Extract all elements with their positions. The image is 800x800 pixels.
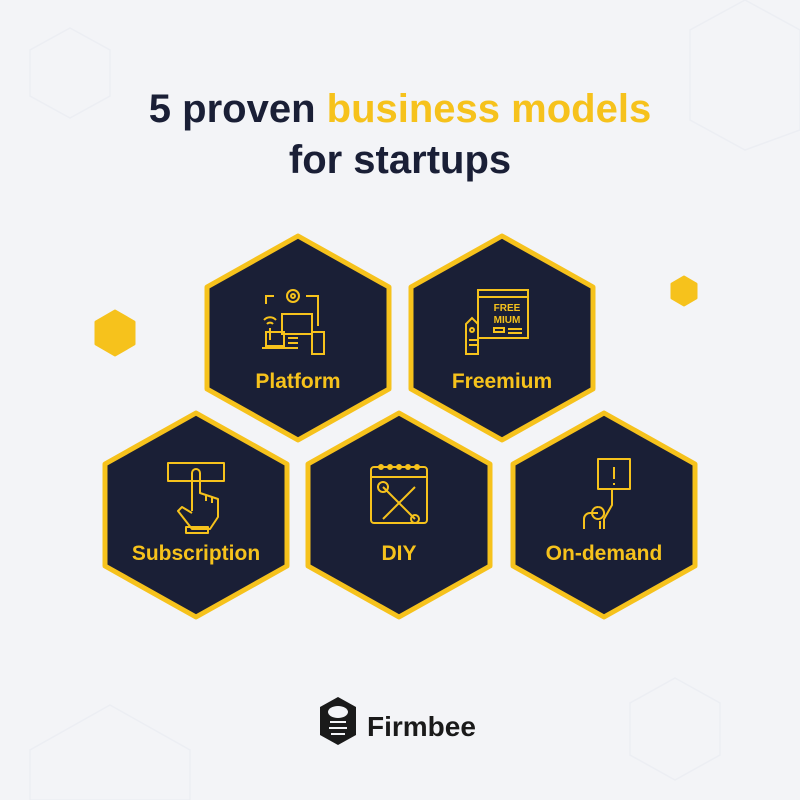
decorative yellow hexagon left	[96, 311, 134, 355]
hexagon: Freemium: FREE	[494, 303, 521, 314]
hexagon: Subscription	[105, 413, 287, 617]
hexagon: Subscription: Subscription	[132, 542, 260, 565]
hexagon: Platform: Platform	[255, 370, 341, 393]
icon: person holding sign	[584, 459, 630, 529]
hexagon: On-demand	[513, 413, 695, 617]
hexagon: Freemium: Freemium	[452, 370, 552, 393]
title	[149, 87, 651, 182]
hexagon: On-demand: On-demand	[546, 542, 662, 565]
hexagon: DIY	[308, 413, 490, 617]
icon: freemium window and tag	[466, 290, 528, 354]
title: 5 proven business models	[149, 87, 651, 131]
hexagon: Freemium	[411, 236, 593, 440]
hexagon: DIY: DIY	[381, 542, 417, 565]
decorative yellow hexagon right	[672, 277, 696, 305]
icon: bee mascot	[320, 697, 356, 745]
title: for startups	[289, 138, 511, 182]
logo: Firmbee	[320, 697, 476, 745]
icon: calendar with tools	[371, 465, 427, 523]
logo: Firmbee: Firmbee	[367, 711, 476, 742]
icon: pointing hand on button	[168, 463, 224, 533]
icon: platform devices	[262, 290, 324, 354]
hexagon: Platform	[207, 236, 389, 440]
hexagon: Freemium: MIUM	[494, 315, 520, 326]
